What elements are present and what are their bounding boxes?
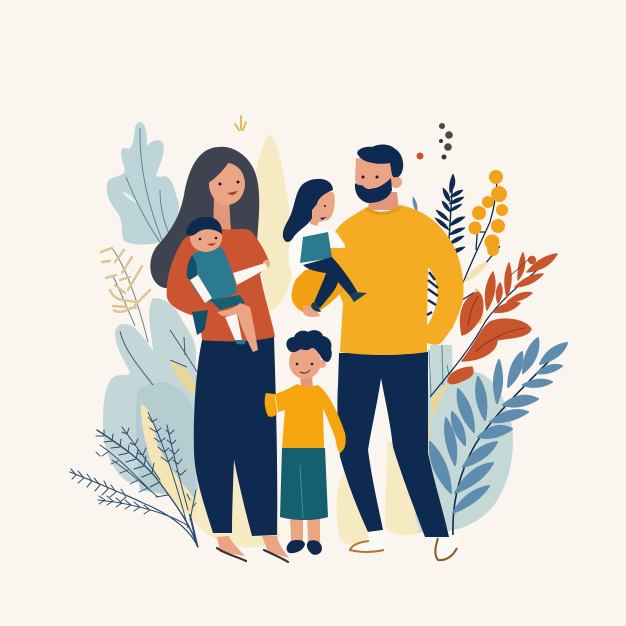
plant: orange leaf branch	[430, 253, 557, 397]
mother hand	[263, 260, 270, 269]
hair	[357, 144, 403, 177]
figure: baby in mother's arms	[186, 217, 268, 352]
shorts	[280, 448, 328, 520]
decoration: dots	[416, 123, 453, 160]
figure: father	[329, 144, 464, 560]
figure: boy	[265, 330, 346, 555]
neck and face	[213, 198, 231, 232]
neck	[368, 192, 399, 210]
plant: right pale circle	[385, 345, 513, 532]
plant: yellow mimosa branch	[462, 170, 508, 300]
feet	[217, 536, 245, 556]
white shirt	[288, 223, 345, 280]
legs	[290, 515, 303, 542]
curly hair	[286, 330, 332, 362]
face	[390, 176, 402, 188]
figure: girl held by father	[283, 179, 367, 317]
shoes	[352, 530, 384, 552]
trousers	[194, 337, 277, 536]
hair	[150, 147, 259, 290]
neck	[300, 375, 313, 388]
plant: navy pine sprig	[70, 412, 198, 547]
head	[310, 191, 335, 226]
father's supporting sleeve	[292, 263, 343, 312]
plant: beige wheat sprig	[101, 248, 150, 342]
shoes	[287, 540, 305, 553]
arm gap showing fern	[427, 267, 438, 325]
background: yellow cone shapes	[180, 134, 426, 548]
shirt	[265, 384, 346, 453]
red sweater	[167, 229, 275, 341]
plant: blue leaf fern	[430, 338, 567, 535]
sweater	[329, 205, 464, 355]
face	[289, 345, 321, 379]
figure: mother	[150, 147, 289, 562]
navy legs	[303, 257, 358, 308]
plant: lower left pale leaves	[103, 298, 198, 520]
decoration: yellow sparkle	[235, 116, 246, 130]
plant: upper left pale leaf	[107, 122, 179, 245]
teal vest	[300, 232, 332, 263]
plant: navy fern	[413, 174, 465, 270]
trousers	[337, 352, 449, 537]
hair	[283, 179, 333, 242]
